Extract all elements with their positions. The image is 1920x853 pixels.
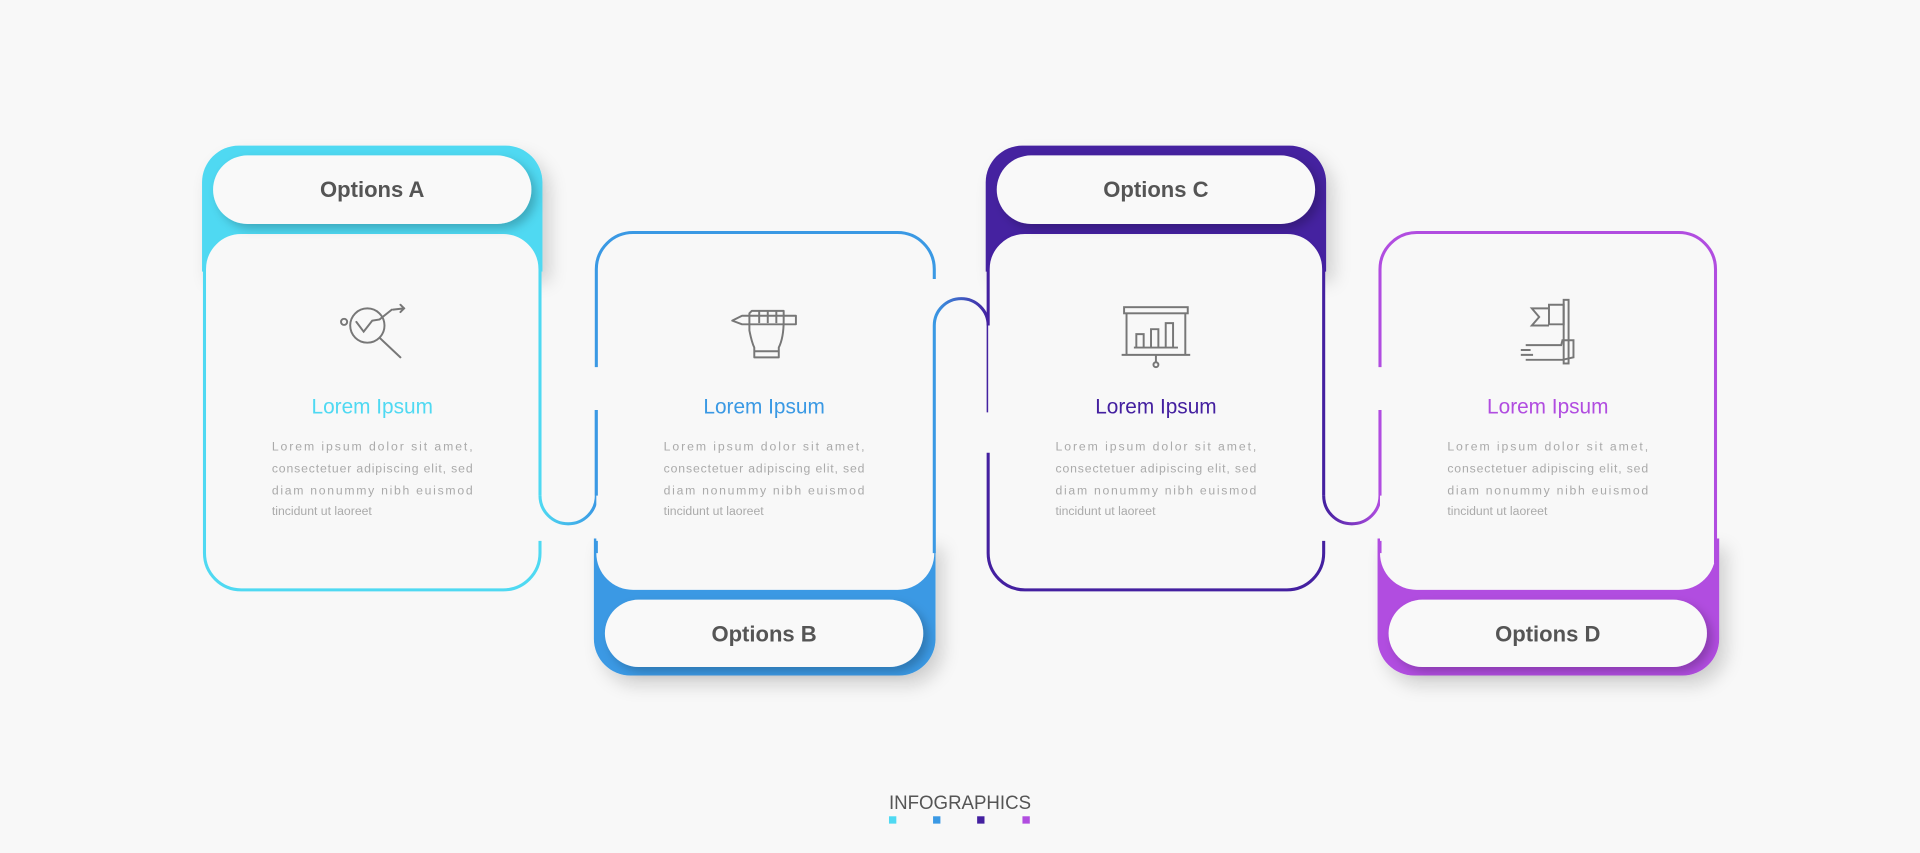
body text C: diam nonummy nibh euismod	[1056, 483, 1257, 497]
body text A: Lorem ipsum dolor sit amet,	[272, 439, 473, 453]
body text D: consectetuer adipiscing elit, sed	[1447, 461, 1648, 475]
label pill A: Options A	[320, 177, 425, 202]
label pill A	[213, 155, 531, 224]
icon: hand with pencil	[732, 311, 796, 357]
heading D: Lorem Ipsum	[1487, 396, 1608, 419]
panel: Options B	[594, 233, 936, 676]
footer: INFOGRAPHICS	[889, 792, 1031, 824]
body text A	[272, 439, 473, 518]
footer: INFOGRAPHICS: INFOGRAPHICS	[889, 792, 1031, 814]
body text B: Lorem ipsum dolor sit amet,	[664, 439, 864, 453]
label pill C: Options C	[1103, 177, 1209, 202]
panel: Options D	[1378, 233, 1719, 676]
body text D: Lorem ipsum dolor sit amet,	[1447, 439, 1648, 453]
body text C: Lorem ipsum dolor sit amet,	[1056, 439, 1256, 453]
label pill C	[997, 155, 1315, 224]
heading C: Lorem Ipsum	[1095, 396, 1217, 419]
body text B: diam nonummy nibh euismod	[664, 483, 865, 497]
panel: Options C	[986, 146, 1326, 590]
body text B: consectetuer adipiscing elit, sed	[664, 461, 865, 475]
body text C: tincidunt ut laoreet	[1056, 504, 1156, 518]
body text D: diam nonummy nibh euismod	[1447, 483, 1648, 497]
label pill D	[1389, 600, 1707, 667]
heading B: Lorem Ipsum	[703, 396, 825, 419]
body text A: consectetuer adipiscing elit, sed	[272, 461, 473, 475]
icon: hand with flag	[1521, 300, 1573, 363]
body text B	[664, 439, 865, 518]
body text C: consectetuer adipiscing elit, sed	[1056, 461, 1257, 475]
label pill B	[605, 600, 923, 667]
body text D: tincidunt ut laoreet	[1447, 504, 1548, 518]
body text D	[1447, 439, 1648, 518]
label pill B: Options B	[711, 621, 817, 646]
heading A: Lorem Ipsum	[312, 396, 433, 419]
panel: Options A	[202, 146, 542, 590]
connector A-B	[540, 410, 596, 524]
body text A: tincidunt ut laoreet	[272, 504, 372, 518]
connector C-D	[1324, 410, 1380, 524]
body text C	[1056, 439, 1257, 518]
icon: magnifier chart	[341, 305, 404, 357]
icon: presentation board	[1122, 307, 1190, 367]
body text B: tincidunt ut laoreet	[664, 504, 764, 518]
connector B-C	[934, 299, 988, 412]
label pill D: Options D	[1495, 621, 1600, 646]
body text A: diam nonummy nibh euismod	[272, 483, 473, 497]
